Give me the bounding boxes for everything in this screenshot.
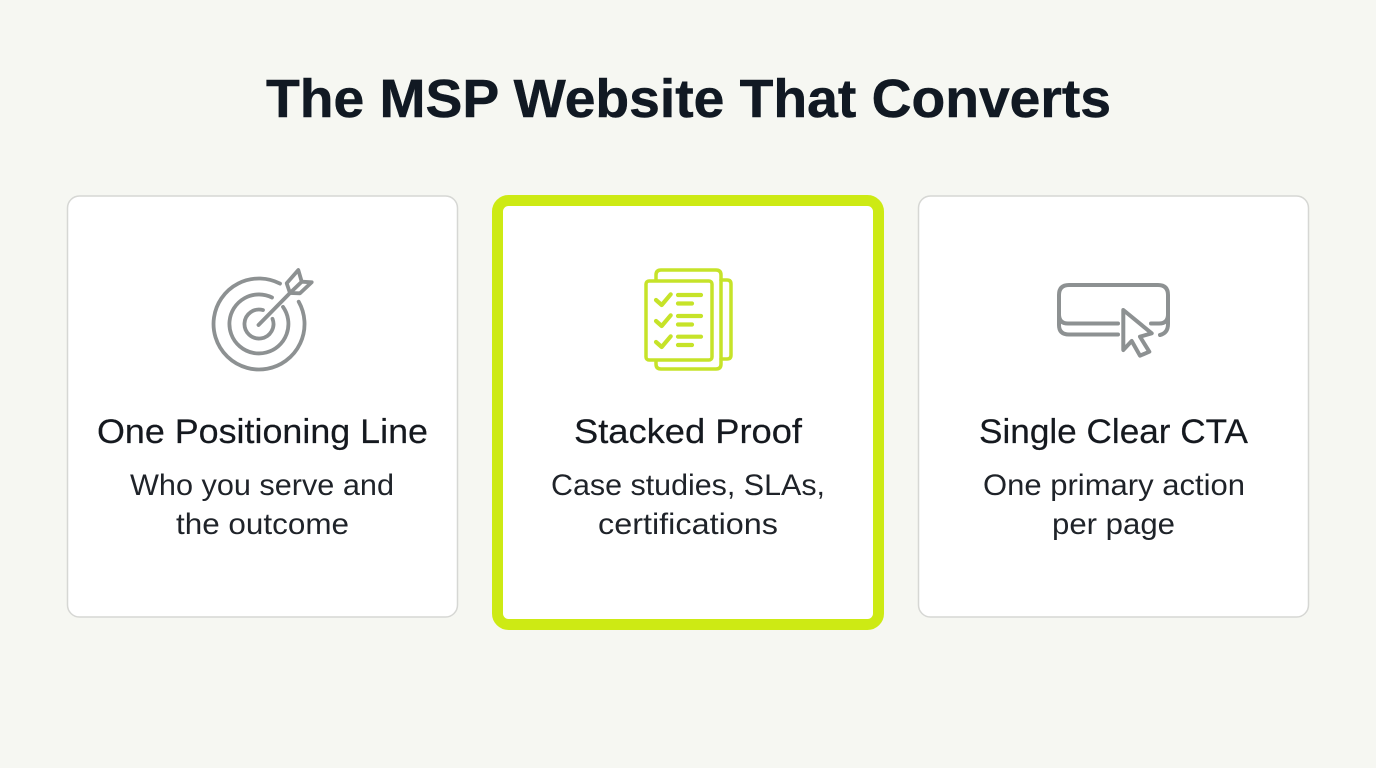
description: [551, 469, 825, 541]
description: Who you serve and: [130, 469, 394, 502]
heading: Stacked Proof: [574, 413, 803, 451]
panel: stacked proof (highlighted): [498, 200, 878, 624]
title: The MSP Website That Converts: [266, 69, 1111, 129]
description: the outcome: [176, 508, 349, 541]
description: [983, 469, 1245, 541]
description: certifications: [598, 508, 778, 541]
description: per page: [1052, 508, 1175, 541]
icon: button with cursor: [1059, 285, 1168, 356]
heading: One Positioning Line: [97, 413, 428, 451]
description: Case studies, SLAs,: [551, 469, 825, 502]
panel: one positioning line: [68, 196, 458, 617]
heading: Single Clear CTA: [979, 413, 1248, 451]
icon: stacked checklist documents: [646, 270, 731, 369]
description: [130, 469, 394, 541]
description: One primary action: [983, 469, 1245, 502]
icon: target with arrow: [214, 270, 312, 369]
panel: single clear cta: [918, 196, 1308, 617]
